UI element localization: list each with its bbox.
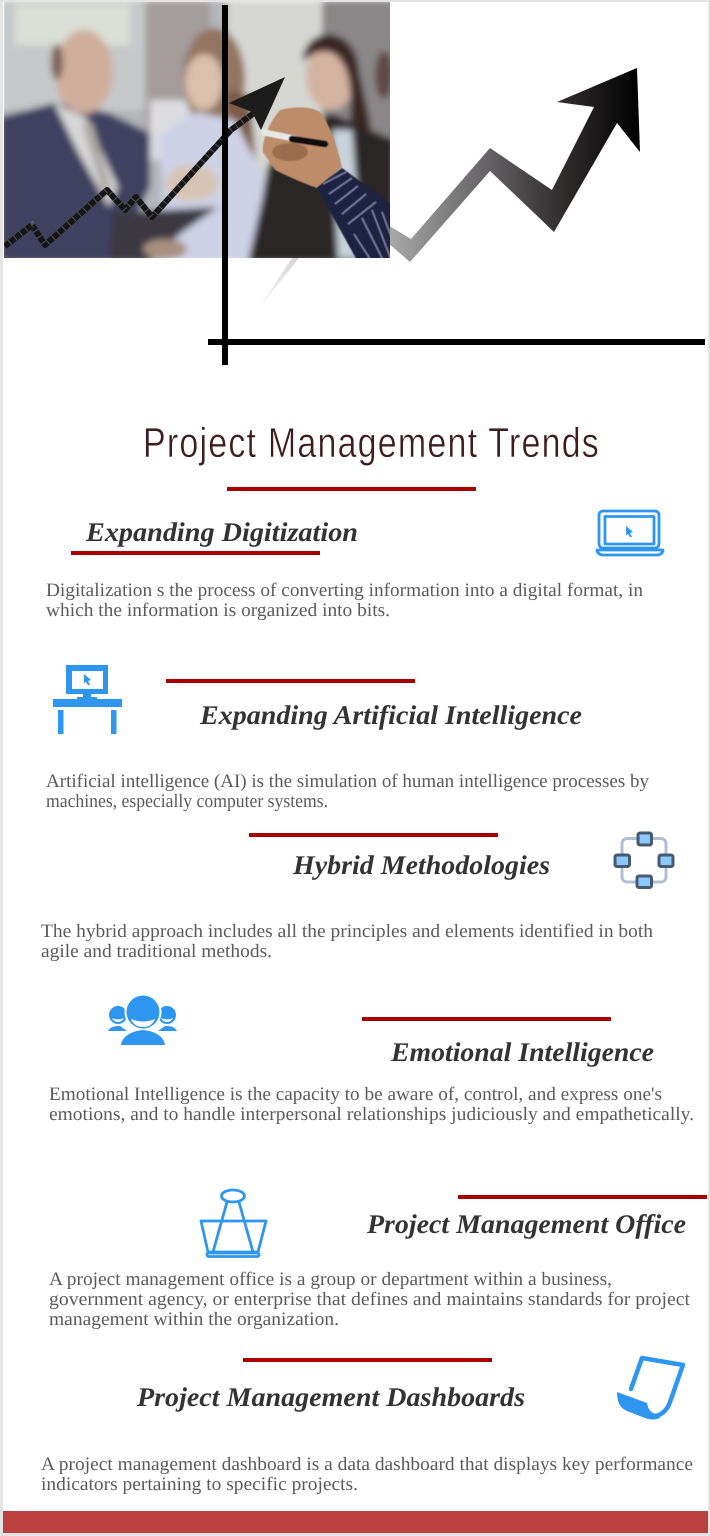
body text: Digitalization s the process of converting information into a digital format, in — [46, 580, 643, 601]
body text: government agency, or enterprise that defines and maintains standards for project — [49, 1289, 691, 1310]
striped sleeve — [316, 168, 390, 258]
heading: Emotional Intelligence — [390, 1037, 654, 1067]
title underline — [227, 487, 476, 491]
panel: hybrid methodologies — [41, 833, 673, 962]
panel: project management office — [49, 1190, 707, 1330]
arrow tail — [256, 258, 299, 312]
body text: A project management office is a group or department within a business, — [49, 1269, 612, 1290]
blurred office background and people — [0, 0, 400, 262]
heading rule — [362, 1017, 611, 1021]
body text: Emotional Intelligence is the capacity to be aware of, control, and express one's — [49, 1084, 662, 1105]
body text: Artificial intelligence (AI) is the simulation of human intelligence processes by — [46, 771, 649, 792]
hand with marker — [262, 107, 342, 188]
heading: Expanding Digitization — [85, 517, 358, 547]
heading: Expanding Artificial Intelligence — [199, 700, 582, 730]
icon: laptop — [597, 511, 663, 555]
panel: expanding artificial intelligence — [46, 665, 654, 812]
footer bar — [3, 1511, 708, 1533]
heading: Project Management Dashboards — [136, 1382, 525, 1412]
icon: connected nodes — [615, 833, 673, 888]
body text: A project management dashboard is a data dashboard that displays key performance — [41, 1454, 693, 1475]
body text: The hybrid approach includes all the principles and elements identified in both — [41, 921, 654, 942]
icon: curled document — [617, 1358, 683, 1420]
heading rule — [166, 679, 415, 683]
chart axes — [208, 5, 705, 365]
icon: binder clip — [201, 1190, 266, 1256]
body text: which the information is organized into bits. — [46, 600, 390, 621]
body text: indicators pertaining to specific projects. — [41, 1474, 358, 1495]
heading rule — [249, 833, 498, 837]
photo: business team and hand drawing arrow — [0, 0, 400, 262]
heading: Project Management Office — [366, 1209, 686, 1239]
title: Project Management Trends — [143, 419, 600, 466]
heading rule — [458, 1195, 707, 1199]
vertical axis — [222, 5, 228, 365]
panel: project management dashboards — [41, 1358, 698, 1495]
heading rule — [71, 551, 320, 555]
body text: management within the organization. — [49, 1309, 339, 1330]
body text: machines, especially computer systems. — [46, 791, 328, 812]
heading rule — [243, 1358, 492, 1362]
horizontal axis — [208, 339, 705, 345]
body text: emotions, and to handle interpersonal relationships judiciously and empathetically. — [49, 1104, 694, 1125]
panel: emotional intelligence — [49, 994, 694, 1125]
body text: agile and traditional methods. — [41, 941, 272, 962]
rising arrow — [388, 68, 640, 262]
chart arrow illustration — [256, 68, 640, 312]
hand-drawn rising arrow — [4, 77, 285, 247]
panel: expanding digitization — [46, 511, 663, 621]
heading: Hybrid Methodologies — [292, 850, 550, 880]
icon: desktop on desk — [53, 665, 122, 734]
icon: smiling group — [108, 994, 177, 1045]
